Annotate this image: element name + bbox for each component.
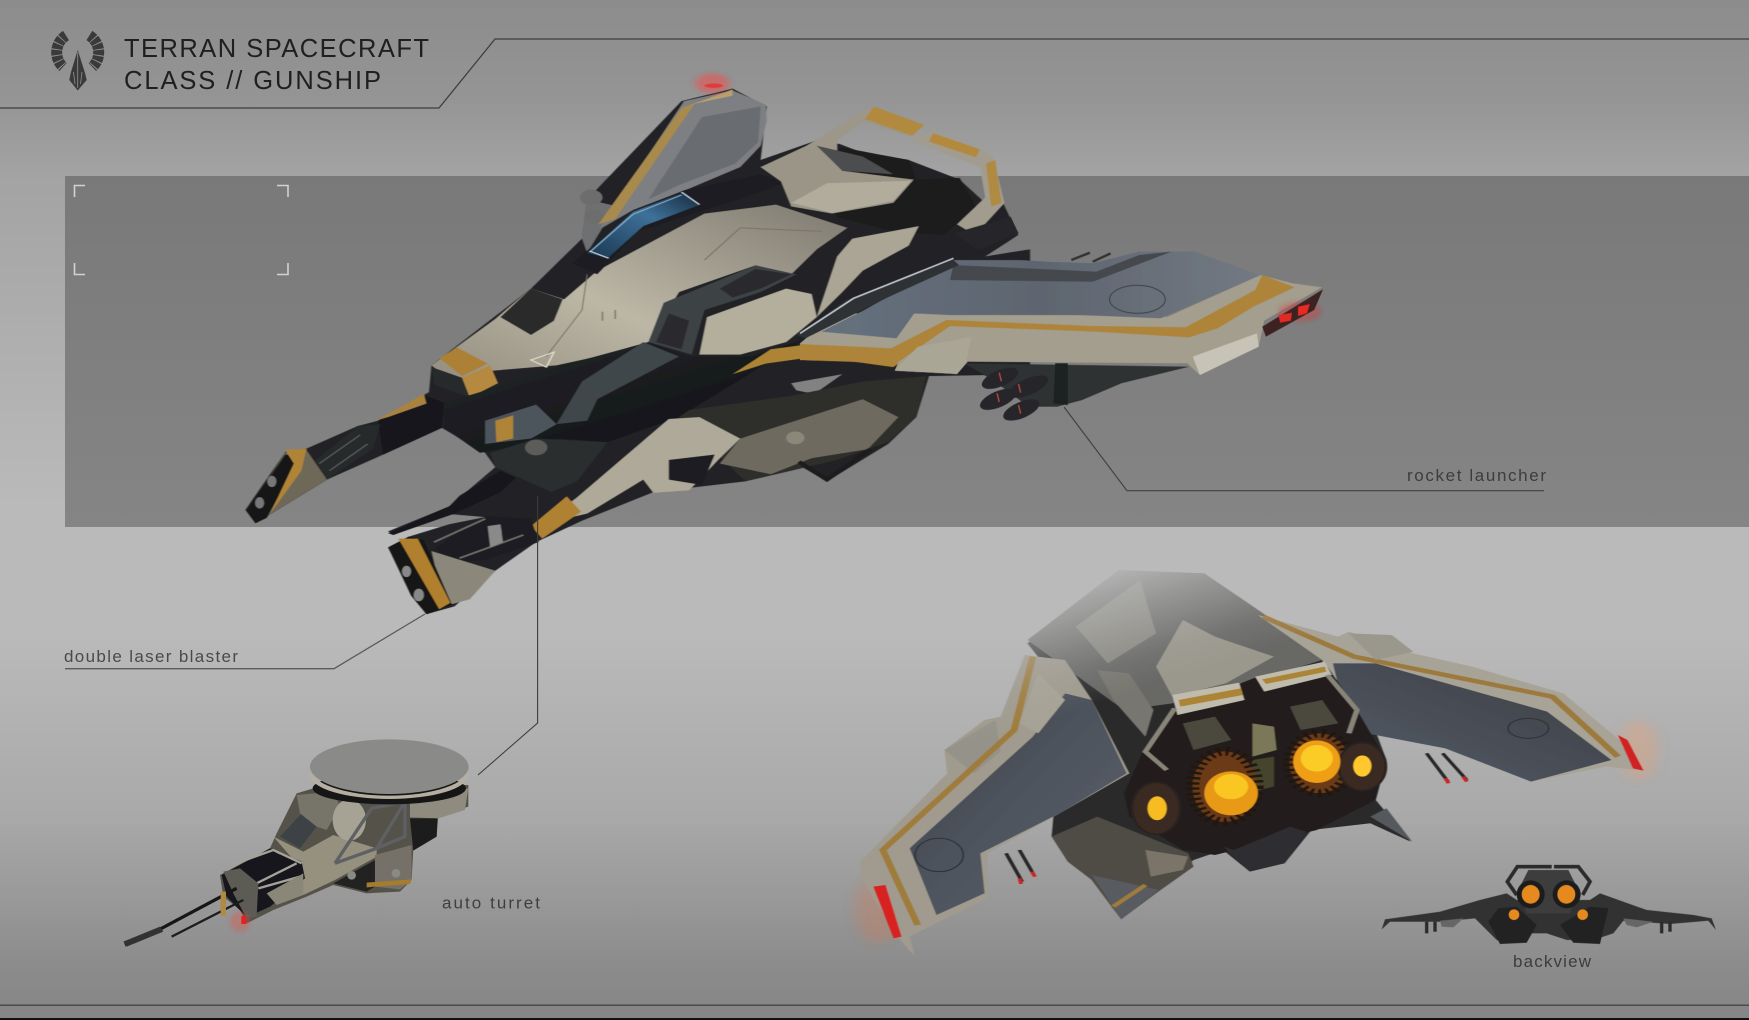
spike fin [1370,808,1412,842]
turret barrels [125,888,237,945]
main gunship [245,73,1030,614]
auto turret [123,739,469,947]
leader line: double laser blaster [65,614,425,669]
central turret mount [490,439,608,492]
cockpit sensor window [500,289,563,335]
orange fuselage stripe [733,320,1030,374]
header rule [0,39,1749,108]
underwing rack [964,363,1189,407]
left wing tail glow [856,877,899,943]
engine frame [1518,870,1578,913]
wings silhouette [1382,893,1716,943]
turret dial [333,799,366,841]
main hull [432,205,847,397]
engine collars [1145,662,1357,770]
tail fin [580,73,767,253]
turret gatling housing [222,848,305,917]
landing struts [1427,922,1670,933]
turret silhouette [220,785,468,923]
rear gatling [954,217,1018,250]
footer rule [0,1004,1749,1006]
wing orange stripe [800,275,1294,363]
rear frame arches [761,106,1004,235]
ship silhouette [245,89,1030,614]
wing lower highlights [1193,333,1259,375]
side shoulder [648,226,919,355]
title: TERRAN SPACECRAFT [124,35,429,63]
rockets [977,363,1052,425]
turret top plate [313,772,466,804]
lower pod [1052,817,1194,919]
wing dorsal guns [1071,253,1111,262]
cockpit canopy [572,174,784,274]
underwing guns [1006,753,1467,882]
turret red light [230,912,250,932]
leader line: rocket launcher [1064,407,1544,491]
rear three-quarter ship view [856,570,1657,957]
bottom edge [0,1018,1749,1020]
upper fuselage [1027,570,1322,737]
main engines [1517,880,1545,908]
small engines [1509,909,1519,920]
viewfinder brackets [74,186,288,274]
label: double laser blaster: double laser blaster [64,647,238,666]
under hull [444,339,807,453]
nose [432,367,470,397]
panel: dark band behind main ship [65,176,1749,527]
label: rocket launcher: rocket launcher [1407,466,1546,485]
auto turret barrel on ship [388,471,516,535]
engine block [817,147,1017,255]
title: CLASS // GUNSHIP [124,67,381,95]
label: auto turret: auto turret [442,894,540,912]
backview silhouette [1382,867,1716,944]
upper laser blaster [247,394,444,523]
icon: winged emblem [57,36,99,90]
rear right wing [1258,615,1644,782]
engine housing [1124,667,1386,871]
title [124,35,429,95]
wing tip lights [1262,289,1323,337]
beacon light [695,73,729,93]
label: backview: backview [1513,952,1592,971]
top armor plate [761,144,914,214]
leader line: auto turret [478,496,538,775]
fuselage silhouette [1027,642,1411,916]
grey wing plate [796,252,1261,338]
opening between hull and lower pod [791,374,842,394]
tan wing body [800,275,1322,375]
turret side plate [410,788,468,818]
rear left wing [860,655,1129,957]
turret body [273,835,377,895]
nozzles [1132,733,1386,834]
lower laser blaster [388,496,581,614]
turret truss [335,802,405,863]
main ship wing [796,217,1323,425]
right wing tail glow [1619,720,1657,780]
lower engine pods [1488,907,1537,944]
lower engine pod [541,376,926,524]
